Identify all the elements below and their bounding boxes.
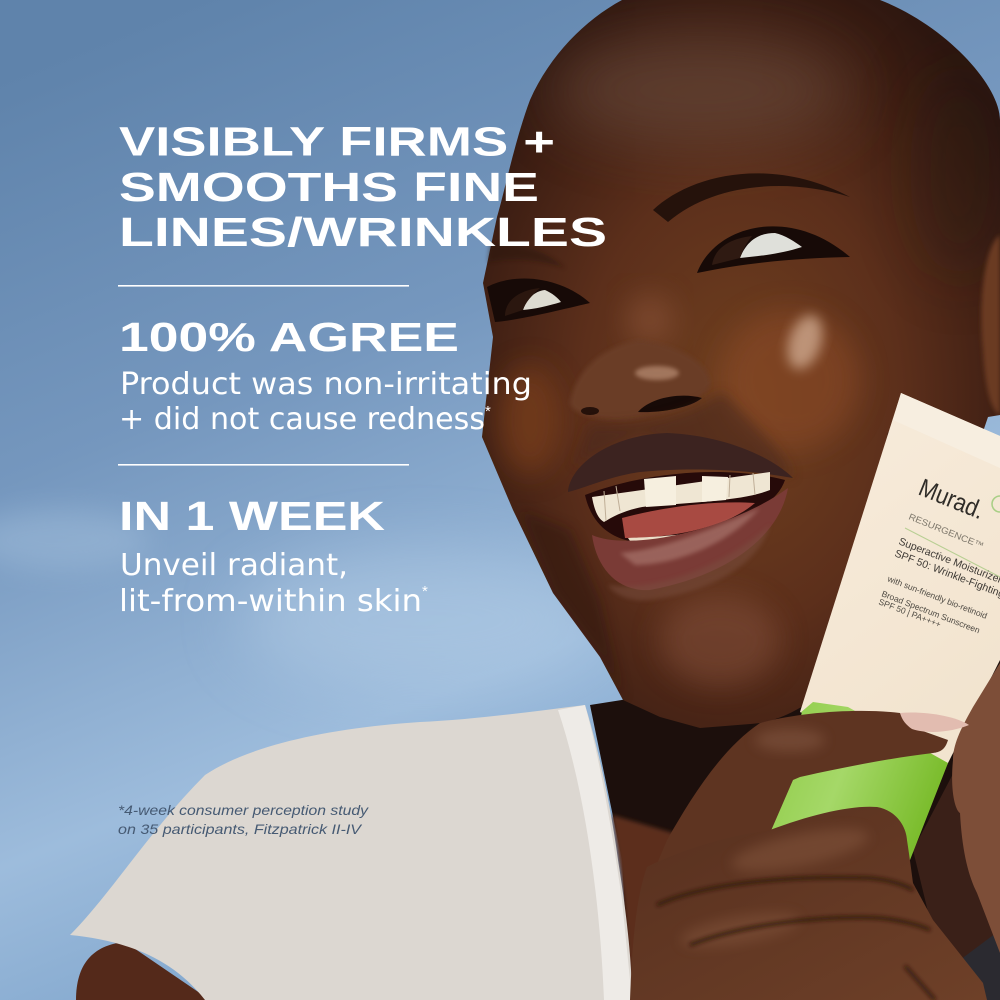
headline: SMOOTHS FINE xyxy=(119,164,539,210)
tube green base xyxy=(770,702,948,860)
fingernail xyxy=(900,713,969,732)
product details: Broad Spectrum Sunscreen xyxy=(880,589,982,635)
tube body xyxy=(800,393,1000,765)
finger gaps xyxy=(657,877,913,905)
product details xyxy=(877,573,989,635)
head and face xyxy=(482,0,1000,728)
under-lip shadow xyxy=(608,525,770,600)
cheek highlight xyxy=(781,310,829,374)
headline xyxy=(119,118,607,255)
stat: in 1 week: Unveil radiant, xyxy=(120,548,348,583)
green logo seal xyxy=(992,496,1000,512)
product details: with sun-friendly bio-retinoid xyxy=(885,573,989,621)
skin shading clipped to head xyxy=(498,35,1000,700)
neck and chest xyxy=(590,640,1000,1000)
chin glow xyxy=(660,595,780,685)
stat: 100% agree: 100% AGREE xyxy=(119,314,459,360)
stat: 100% agree: Product was non-irritating xyxy=(120,367,532,402)
headline: VISIBLY FIRMS + xyxy=(119,118,555,164)
stat: in 1 week xyxy=(119,493,428,619)
upper teeth xyxy=(592,472,770,522)
left cheek shade xyxy=(498,365,562,475)
jaw shadow xyxy=(527,516,614,683)
footnote: *4-week consumer perception study xyxy=(118,802,369,818)
stat: 100% agree: * xyxy=(485,403,491,420)
cheek glow xyxy=(720,310,860,450)
nose xyxy=(570,340,710,420)
stat: in 1 week: IN 1 WEEK xyxy=(119,493,385,539)
product tube xyxy=(770,393,1000,860)
hand holding tube xyxy=(630,663,1000,1000)
left eye xyxy=(487,278,590,322)
footnote: on 35 participants, Fitzpatrick II-IV xyxy=(118,821,363,837)
right eye xyxy=(697,226,850,273)
product line: RESURGENCE™ xyxy=(907,512,985,551)
upper lip xyxy=(568,433,793,492)
lower teeth xyxy=(628,531,698,544)
ear shade xyxy=(981,235,1000,415)
nose bridge light xyxy=(626,294,674,346)
shadow on cheek xyxy=(876,432,893,490)
back of hand and fingers xyxy=(630,807,987,1000)
white t-shirt xyxy=(70,705,632,1000)
product details: SPF 50 | PA++++ xyxy=(877,597,942,629)
right finger xyxy=(952,663,1000,953)
index finger and back of hand xyxy=(650,711,948,880)
footnote xyxy=(118,802,369,837)
top of head shading xyxy=(550,35,850,145)
finger highlights xyxy=(728,820,872,880)
mouth interior xyxy=(585,472,785,543)
arm lower left xyxy=(76,942,210,1000)
stat: 100% agree xyxy=(119,314,532,437)
stat: in 1 week: lit-from-within skin xyxy=(119,584,422,619)
tongue xyxy=(622,502,755,538)
crimped seal xyxy=(893,393,1000,468)
lower lip xyxy=(592,488,788,590)
headline: LINES/WRINKLES xyxy=(119,209,607,255)
left brow shadow xyxy=(488,244,565,268)
stat: in 1 week: * xyxy=(422,583,428,600)
stat: 100% agree: + did not cause redness xyxy=(119,402,485,437)
philtrum shading xyxy=(575,392,793,477)
right eyebrow xyxy=(653,173,850,222)
brand name: Murad. xyxy=(915,474,988,525)
knuckle light xyxy=(755,728,825,752)
head silhouette xyxy=(482,0,1000,728)
